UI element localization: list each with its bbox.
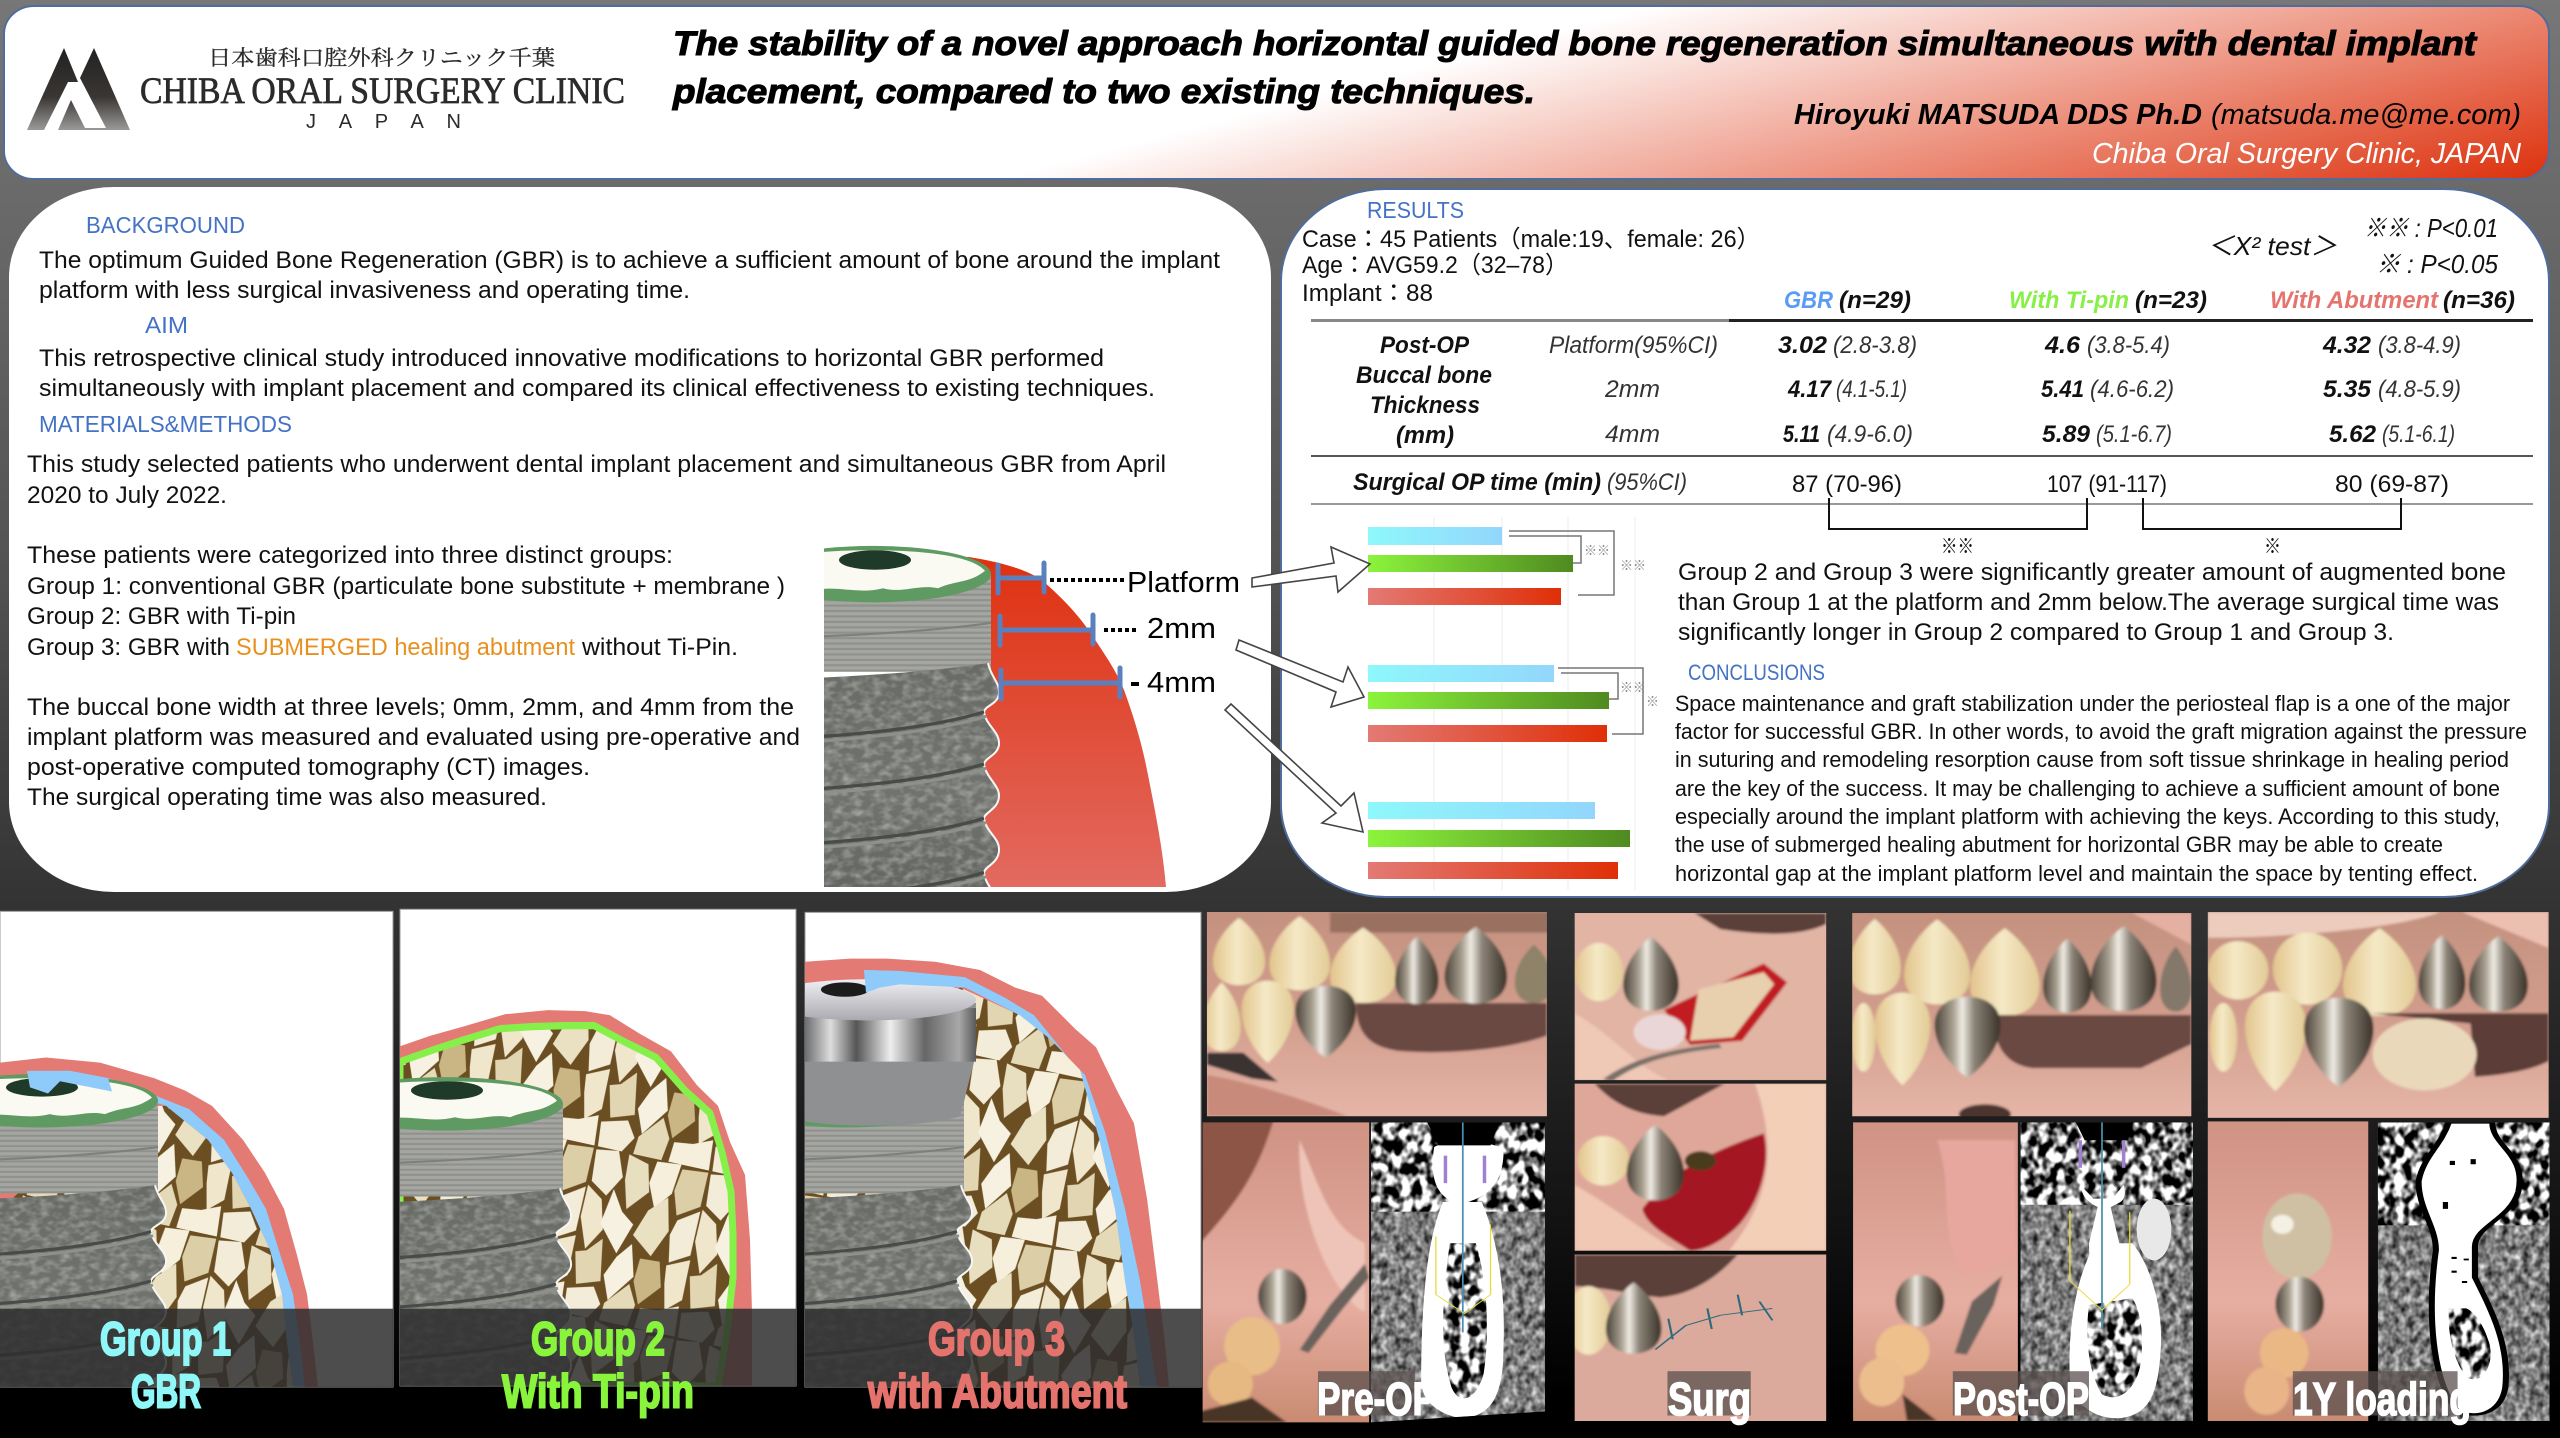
- photo: one year occlusal: [2202, 1120, 2375, 1423]
- caption: [867, 1312, 1127, 1418]
- authors: (matsuda.me@me.com): [2211, 99, 2521, 131]
- clinic name English: CHIBA ORAL SURGERY CLINIC: [140, 71, 625, 112]
- values: 2mm: 5.41: [2041, 376, 2084, 403]
- legend: statistical test: ※※ : P<0.01: [2364, 213, 2498, 243]
- surgical time row: 87 (70-96): [1792, 471, 1902, 498]
- heading: materials and methods: MATERIALS&METHODS: [39, 411, 292, 437]
- heading: background: BACKGROUND: [86, 212, 245, 238]
- photo: pre-op buccal: [1200, 909, 1556, 1120]
- label: surgery: [1667, 1371, 1751, 1415]
- photo: pre-op occlusal: [1200, 1120, 1373, 1425]
- values: 2mm: [1787, 376, 2461, 403]
- caption: Group 3: [928, 1312, 1065, 1365]
- text: methods: The buccal bone width at three levels; 0mm, 2mm, and 4mm from the: [27, 694, 794, 721]
- text: aim: [39, 345, 1155, 402]
- values: platform: (2.8-3.8): [1833, 332, 1917, 359]
- column headers: (n=36): [2443, 287, 2515, 314]
- heading: results: RESULTS: [1367, 197, 1464, 223]
- panel: group 2 illustration: [400, 908, 796, 1418]
- photo captions: [1317, 1373, 2471, 1425]
- column headers: With Abutment: [2270, 287, 2439, 314]
- title: placement, compared to two existing techniques.: [672, 73, 1535, 111]
- surgical time row: Surgical OP time (min): [1353, 469, 1601, 496]
- arrow: platform level to chart: [1252, 547, 1370, 592]
- 2mm bars: [1368, 665, 1609, 742]
- values: 2mm: (4.6-6.2): [2090, 376, 2174, 403]
- heading: conclusions: CONCLUSIONS: [1688, 660, 1825, 685]
- CT: one year: [2378, 1122, 2550, 1421]
- row labels: 2mm: [1604, 376, 1660, 403]
- membrane: [864, 970, 1157, 1387]
- 2mm significance: ※: [1646, 694, 1659, 709]
- caption: with Abutment: [867, 1365, 1127, 1418]
- healing abutment: [805, 979, 976, 1126]
- text: conclusions: [1675, 691, 2527, 886]
- platform measurement: [998, 563, 1044, 593]
- text: results summary: significantly longer in Group 2 compared to Group 1 and Group 3.: [1678, 619, 2394, 646]
- text: background: platform with less surgical invasiveness and operating time.: [39, 277, 690, 304]
- column headers: (n=23): [2135, 287, 2207, 314]
- membrane: [30, 1071, 305, 1387]
- panel: results and conclusions: [1281, 189, 2549, 897]
- text: methods: These patients were categorized into three distinct groups:: [27, 542, 673, 569]
- panel: background, aim, methods: [9, 187, 1271, 938]
- photo: post-op occlusal: [1846, 1120, 2024, 1423]
- text: methods: post-operative computed tomography (CT) images.: [27, 754, 590, 781]
- graft particles: [0, 1106, 293, 1387]
- clinic country: J A P A N: [306, 111, 461, 133]
- values: 4mm: 5.89: [2042, 421, 2091, 448]
- values: 2mm: 4.17: [1787, 376, 1833, 403]
- logo: [27, 42, 625, 133]
- legend: statistical test: [2207, 213, 2498, 279]
- caption: GBR: [131, 1365, 201, 1418]
- text: conclusions: the use of submerged healing abutment for horizontal GBR may be able to create: [1675, 832, 2443, 857]
- diagram: implant with measurement levels: [824, 546, 1238, 887]
- text: background: [39, 247, 1220, 304]
- caption: post-op: Post-OP: [1953, 1373, 2089, 1425]
- text: methods: Group 2: GBR with Ti-pin: [27, 603, 296, 630]
- row labels: Platform(95%CI): [1549, 332, 1718, 359]
- text: conclusions: in suturing and remodeling resorption cause from soft tissue shrinkage in healing period: [1675, 747, 2509, 772]
- text: background: The optimum Guided Bone Regeneration (GBR) is to achieve a sufficient amount of bone around the implant: [39, 247, 1220, 274]
- title: [672, 25, 2478, 111]
- text: methods: 2020 to July 2022.: [27, 482, 227, 509]
- row labels: Thickness: [1370, 392, 1480, 419]
- platform significance: ※※: [1584, 543, 1610, 558]
- surgical time row: [1353, 469, 2449, 498]
- significance brackets: ※: [2264, 536, 2281, 558]
- values: platform: [1778, 332, 2461, 359]
- values: platform: (3.8-5.4): [2087, 332, 2170, 359]
- heading: aim: AIM: [145, 312, 188, 338]
- row labels: Buccal bone: [1356, 362, 1492, 389]
- panel: group 3 illustration: [804, 912, 1202, 1409]
- CT: pre-op: [1371, 1122, 1545, 1424]
- text: conclusions: factor for successful GBR. In other words, to avoid the graft migration against the pressure: [1675, 719, 2527, 744]
- title: The stability of a novel approach horizontal guided bone regeneration simultaneous with dental implant: [673, 25, 2478, 63]
- column headers: With Ti-pin: [2009, 287, 2129, 314]
- clinic name Japanese: 日本歯科口腔外科クリニック千葉: [208, 42, 555, 72]
- caption: Group 1: [100, 1312, 231, 1365]
- panel: group 1 illustration: [0, 911, 393, 1438]
- text: conclusions: Space maintenance and graft stabilization under the periosteal flap is a one of the major: [1675, 691, 2510, 716]
- 2mm significance: [1558, 668, 1659, 734]
- 4mm bars: [1368, 802, 1630, 879]
- significance brackets: ※※: [1941, 536, 1974, 558]
- values: 2mm: (4.8-5.9): [2378, 376, 2461, 403]
- column headers: (n=29): [1839, 287, 1911, 314]
- caption band: [400, 1309, 796, 1386]
- legend: statistical test: ＜X² test＞: [2207, 231, 2337, 261]
- significance brackets: [1829, 498, 2401, 558]
- column headers: [1784, 287, 2515, 314]
- gingiva: [400, 1010, 752, 1386]
- values: platform: (3.8-4.9): [2378, 332, 2461, 359]
- icon: mountain logo mark: [27, 48, 130, 130]
- caption band: [0, 1309, 393, 1387]
- caption: surg: Surg: [1668, 1373, 1751, 1425]
- text: methods: implant platform was measured and evaluated using pre-operative and: [27, 724, 800, 751]
- caption: With Ti-pin: [502, 1365, 694, 1418]
- text: methods: The surgical operating time was also measured.: [27, 784, 547, 811]
- authors: Hiroyuki MATSUDA DDS Ph.D: [1794, 99, 2202, 131]
- surgical time row: (95%CI): [1607, 469, 1687, 496]
- values: 2mm: (4.1-5.1): [1836, 376, 1907, 403]
- text: methods: [27, 451, 1166, 811]
- graft particles and Ti-mesh: [400, 1026, 733, 1386]
- caption: Group 2: [531, 1312, 665, 1365]
- text: methods: without Ti-Pin.: [581, 634, 738, 661]
- text: conclusions: horizontal gap at the implant platform level and maintain the space by tenting effect.: [1675, 861, 2478, 886]
- text: case summary: Case：45 Patients（male:19、female: 26）: [1302, 226, 1760, 253]
- label: platform: Platform: [1127, 567, 1240, 599]
- values: 4mm: 5.11: [1783, 421, 1820, 448]
- surgical time row: 107 (91-117): [2047, 471, 2167, 498]
- graft particles: [805, 988, 1140, 1387]
- chart: buccal thickness bars: [1368, 517, 1659, 890]
- photo: surgery flap: [1569, 910, 1833, 1082]
- values: platform: 4.32: [2322, 332, 2372, 359]
- row labels: (mm): [1396, 422, 1454, 449]
- text: conclusions: are the key of the success. It may be challenging to achieve a sufficient amount of bone: [1675, 776, 2500, 801]
- authors: [1794, 99, 2521, 170]
- values: 4mm: [1783, 421, 2455, 448]
- values: 4mm: 5.62: [2329, 421, 2377, 448]
- implant: [824, 546, 1000, 887]
- label: one year loading: [2293, 1371, 2458, 1415]
- values: 4mm: (5.1-6.1): [2382, 421, 2455, 448]
- illustrations of the three groups: [0, 909, 1201, 1438]
- photo: surgery suture: [1566, 1252, 1833, 1423]
- implant: [0, 1074, 167, 1387]
- text: methods: Group 3: GBR with: [27, 634, 230, 661]
- surgical time row: 80 (69-87): [2335, 471, 2449, 498]
- values: 4mm: (4.9-6.0): [1827, 421, 1913, 448]
- arrow: 2mm level to chart: [1236, 640, 1364, 707]
- clinical photo series: [1200, 909, 2553, 1425]
- arrow: 4mm level to chart: [1225, 704, 1363, 832]
- label: post-op: [1953, 1371, 2089, 1415]
- platform significance: ※※: [1620, 558, 1646, 573]
- 4mm measurement: [1001, 668, 1120, 699]
- caption band: [805, 1309, 1201, 1387]
- values: platform: 3.02: [1778, 332, 1828, 359]
- authors: Chiba Oral Surgery Clinic, JAPAN: [2092, 138, 2521, 170]
- caption: [502, 1312, 694, 1418]
- gingiva: [0, 1058, 318, 1387]
- implant: [400, 1077, 572, 1386]
- text: results summary: Group 2 and Group 3 were significantly greater amount of augmented bone: [1678, 559, 2506, 586]
- label: 2mm: 2mm: [1147, 613, 1216, 645]
- CT: post-op: [2020, 1122, 2193, 1421]
- photo: surgery graft: [1569, 1080, 1833, 1253]
- row labels: [1356, 332, 1718, 449]
- text: case summary: [1302, 226, 1760, 307]
- caption: pre-op: Pre-OP: [1317, 1373, 1436, 1425]
- platform bars: [1368, 527, 1573, 605]
- text: conclusions: especially around the implant platform with achieving the keys. According to this study,: [1675, 804, 2500, 829]
- buccal bone red region: [950, 557, 1166, 887]
- label: 4mm: 4mm: [1147, 667, 1216, 699]
- text: case summary: Implant：88: [1302, 280, 1433, 307]
- legend: statistical test: ※ : P<0.05: [2376, 249, 2498, 279]
- header banner: [4, 6, 2549, 179]
- row labels: 4mm: [1605, 421, 1660, 448]
- values: platform: 4.6: [2044, 332, 2081, 359]
- text: methods: SUBMERGED healing abutment: [236, 634, 575, 661]
- label: 2mm: [1104, 613, 1216, 645]
- values: 2mm: 5.35: [2323, 376, 2372, 403]
- caption: [100, 1312, 231, 1418]
- platform significance: [1509, 531, 1646, 595]
- text: methods: This study selected patients who underwent dental implant placement and simultaneous GBR from April: [27, 451, 1166, 478]
- table: buccal thickness and surgical time: [1311, 287, 2533, 558]
- column headers: GBR: [1784, 287, 1834, 314]
- photo: post-op buccal: [1846, 910, 2197, 1125]
- gingiva: [805, 959, 1169, 1387]
- text: methods: Group 1: conventional GBR (particulate bone substitute + membrane ): [27, 573, 785, 600]
- text: case summary: Age：AVG59.2（32–78）: [1302, 252, 1568, 279]
- text: results summary: [1678, 559, 2506, 646]
- implant: [805, 1101, 973, 1387]
- 2mm significance: ※※: [1620, 680, 1646, 695]
- caption: 1Y loading: 1Y loading: [2293, 1373, 2471, 1425]
- 2mm measurement: [1000, 615, 1093, 645]
- row labels: Post-OP: [1380, 332, 1470, 359]
- photo: one year buccal: [2202, 910, 2553, 1120]
- text: aim: This retrospective clinical study introduced innovative modifications to horizontal GBR performed: [39, 345, 1104, 372]
- label: pre-op: [1318, 1371, 1415, 1415]
- text: aim: simultaneously with implant placement and compared its clinical effectiveness to existing techniques.: [39, 375, 1155, 402]
- values: 4mm: (5.1-6.7): [2096, 421, 2172, 448]
- text: results summary: than Group 1 at the platform and 2mm below.The average surgical time was: [1678, 589, 2499, 616]
